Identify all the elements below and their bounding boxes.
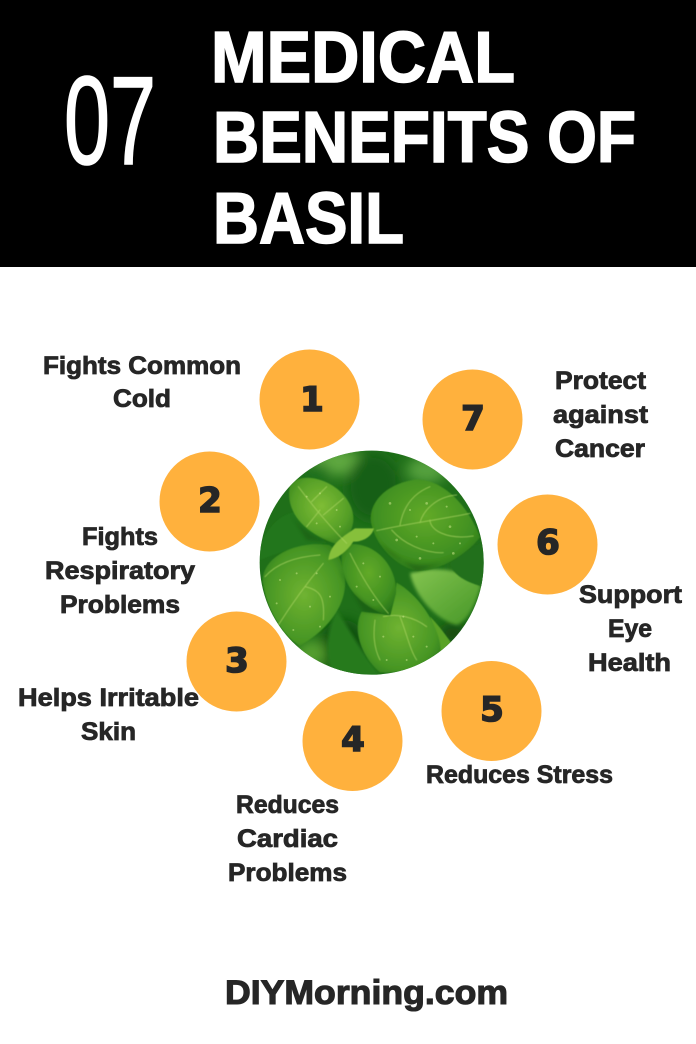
leaf shading (298, 526, 432, 615)
badge 2: 2 (198, 481, 222, 521)
label 1 (43, 352, 241, 413)
badge 7: 7 (461, 399, 485, 439)
item 3 (18, 612, 286, 746)
item 4 (228, 691, 402, 887)
label 4: Reduces (236, 791, 339, 819)
label 2: Problems (60, 591, 180, 619)
badge 1: 1 (300, 380, 324, 420)
badge 7 (422, 370, 522, 470)
label 1: Cold (113, 385, 171, 413)
title (211, 18, 636, 259)
title: BENEFITS OF (213, 98, 636, 178)
label 1: Fights Common (43, 352, 241, 380)
stem (328, 528, 374, 560)
badge 2 (160, 452, 260, 552)
label 3: Skin (81, 718, 136, 746)
badge 3 (186, 612, 286, 712)
label 7 (553, 367, 649, 463)
label 7: against (553, 401, 649, 429)
badge 5 (442, 661, 542, 761)
badge 5: 5 (480, 690, 504, 730)
item 1 (43, 350, 360, 450)
item 2 (45, 452, 260, 619)
label 7: Protect (555, 367, 647, 395)
label 5: Reduces Stress (426, 761, 613, 789)
title: MEDICAL (211, 18, 515, 98)
label 6 (579, 581, 683, 677)
label 3: Helps Irritable (18, 684, 199, 712)
label 4: Cardiac (237, 825, 338, 853)
basil photo circle (257, 447, 490, 677)
label 2: Respiratory (45, 557, 195, 585)
badge 6 (498, 494, 598, 594)
label 2: Fights (82, 523, 158, 551)
dew drops (276, 492, 461, 661)
leaf: top right (371, 479, 480, 571)
number 07: 07 (64, 52, 156, 191)
leaf: bottom (358, 583, 441, 673)
item 5 (426, 661, 613, 789)
label 6: Eye (608, 615, 652, 643)
item 6 (498, 494, 683, 677)
leaf: center (342, 544, 396, 616)
label 3 (18, 684, 199, 746)
label 6: Health (588, 649, 671, 677)
veins (265, 487, 473, 660)
label 7: Cancer (555, 435, 645, 463)
label 4 (228, 791, 347, 887)
badge 4: 4 (341, 720, 365, 760)
label 2 (45, 523, 195, 619)
leaf: top left (289, 478, 353, 545)
badge 4 (302, 691, 402, 791)
footer website: DIYMorning.com (225, 974, 508, 1012)
item 7 (422, 367, 649, 470)
badge 1 (260, 350, 360, 450)
badge 3: 3 (225, 641, 249, 681)
leaf: lower left (263, 544, 345, 646)
label 4: Problems (228, 859, 347, 887)
badge 6: 6 (536, 523, 560, 563)
header banner (0, 0, 696, 267)
label 6: Support (579, 581, 683, 609)
title: BASIL (213, 179, 404, 259)
back leaves (260, 541, 262, 560)
